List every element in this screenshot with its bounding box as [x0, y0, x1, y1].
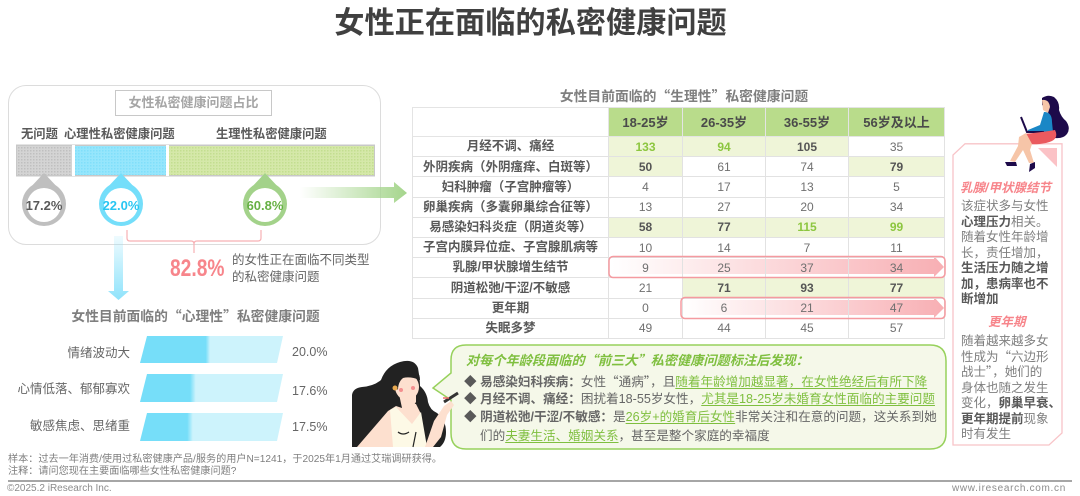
table: physical problems by age: 45 [800, 321, 814, 335]
table: physical problems by age [412, 107, 945, 339]
highlight arrows on table [646, 258, 944, 318]
illustration: woman with laptop [1005, 96, 1069, 172]
table: physical problems by age: 子宫内膜异位症、子宫腺肌病等 [423, 240, 598, 254]
table: physical problems by age: 11 [890, 241, 903, 255]
note: menopause [961, 315, 1061, 442]
callout: 82.8% [170, 253, 370, 284]
table: physical problems by age: 34 [890, 261, 903, 275]
table: physical problems by age: 133 [635, 140, 656, 154]
finding 3: 们的夫妻生活、婚姻关系，甚至是整个家庭的幸福度 [480, 429, 770, 443]
table: physical problems by age: 94 [717, 140, 731, 154]
drop: physical 60.8%: 60.8% [247, 198, 284, 213]
bar: anxiety: 17.5% [292, 420, 327, 434]
bar: mood swings: 20.0% [292, 345, 327, 359]
note: menopause: 更年期提前现象 [961, 408, 1049, 426]
table: physical problems by age: 99 [890, 220, 903, 234]
panel: notes on breast and menopause [952, 143, 1063, 446]
table: physical problems by age: 21 [800, 301, 814, 315]
table: physical problems by age: 13 [639, 200, 652, 214]
bar: anxiety: 敏感焦虑、思绪重 [30, 418, 130, 433]
note: breast / thyroid nodules: 该症状多与女性 [961, 199, 1049, 213]
table: physical problems by age: 易感染妇科炎症（阴道炎等） [429, 220, 592, 234]
callout: 82.8%: 的女性正在面临不同类型 [232, 253, 370, 267]
table: physical problems by age: 27 [717, 200, 731, 214]
note: menopause: 随着越来越多女 [961, 330, 1049, 349]
drop: none 17.2%: 17.2% [26, 198, 63, 213]
table: physical problems by age: 49 [639, 321, 652, 335]
table: physical problems by age: 18-25岁 [622, 114, 669, 130]
table: physical problems by age: 17 [717, 180, 731, 194]
table: physical problems by age: 13 [800, 180, 814, 194]
table: physical problems by age: 61 [717, 160, 731, 174]
note: breast / thyroid nodules: 长，责任增加， [961, 246, 1049, 260]
note: menopause: 战士”，她们的 [961, 361, 1042, 380]
drop: mental 22.0% [99, 173, 143, 226]
table: physical problems by age: 10 [639, 241, 652, 255]
table: physical problems by age: 失眠多梦 [485, 321, 536, 335]
table: physical problems by age: 卵巢疾病（多囊卵巢综合征等） [423, 200, 598, 214]
table: physical problems by age: 93 [800, 281, 814, 295]
note: breast / thyroid nodules: 生活压力随之增 [961, 261, 1049, 275]
footer rule [8, 480, 1072, 482]
arrow: to physical table [300, 182, 407, 203]
table: physical problems by age: 20 [800, 200, 814, 214]
table: physical problems by age: 74 [800, 160, 814, 174]
arrow: to mental chart [108, 236, 129, 300]
drop: mental 22.0%: 22.0% [103, 198, 140, 213]
heading: mental problems: 女性目前面临的“心理性”私密健康问题 [71, 305, 320, 325]
highlight outlines on table [608, 256, 946, 320]
note: breast / thyroid nodules: 心理压力相关。 [961, 214, 1049, 228]
panel heading: 女性私密健康问题占比 [128, 95, 258, 110]
table: physical problems by age: 7 [804, 241, 810, 255]
table: physical problems by age: 35 [890, 140, 903, 154]
segment labels: 无问题 [21, 127, 58, 141]
table: physical problems by age: 56岁及以上 [863, 114, 930, 130]
bracket 82.8% [127, 230, 261, 253]
note: breast / thyroid nodules: 断增加 [961, 292, 999, 306]
footer right: www.iresearch.com.cn [952, 483, 1066, 494]
finding 3: ◆ 阴道松弛/干涩/不敏感：是26岁+的婚育后女性非常关注和在意的问题，这关系到她 [464, 410, 937, 424]
table: physical problems by age: 5 [893, 180, 900, 194]
table: physical problems by age: 26-35岁 [701, 114, 747, 130]
panel: share of private health problems [8, 85, 381, 245]
table: physical problems by age: 77 [717, 220, 731, 234]
note: breast / thyroid nodules: 随着女性年龄增 [961, 230, 1049, 244]
table: physical problems by age: 25 [717, 261, 731, 275]
title: 女性正在面临的私密健康问题 [334, 7, 727, 40]
table: physical problems by age: 14 [717, 241, 731, 255]
bar: low mood [17, 374, 327, 402]
table: physical problems by age: 外阴疾病（外阴瘙痒、白斑等） [423, 160, 598, 174]
table: physical problems by age: 71 [717, 281, 731, 295]
table: physical problems by age: 79 [890, 160, 903, 174]
table: physical problems by age: 乳腺/甲状腺增生结节 [452, 260, 568, 274]
note: menopause: 性成为“六边形 [961, 346, 1049, 364]
note: breast / thyroid nodules: 加，患病率也不 [961, 276, 1049, 290]
table: physical problems by age: 57 [890, 321, 903, 335]
table: physical problems by age: 21 [639, 281, 652, 295]
callout: 82.8%: 的私密健康问题 [232, 270, 320, 284]
finding 3 [464, 410, 937, 443]
finding 1: ◆ 易感染妇科疾病：女性“通病”，且随着年龄增加越显著，在女性绝经后有所下降 [464, 371, 927, 390]
table: physical problems by age: 6 [721, 301, 727, 315]
footnotes [8, 453, 442, 477]
segment labels: 生理性私密健康问题 [216, 127, 327, 141]
stacked bar with percentage drops [16, 144, 407, 300]
table: physical problems by age: 9 [642, 261, 649, 275]
bar: mood swings: 情绪波动大 [67, 346, 130, 360]
note: menopause: 时有发生 [961, 423, 1011, 442]
panel heading [115, 90, 272, 116]
drop: none 17.2% [22, 173, 66, 226]
table: physical problems by age: 115 [797, 220, 817, 234]
drop: physical 60.8% [243, 173, 287, 226]
segment labels: 心理性私密健康问题 [64, 127, 175, 141]
footer left: ©2025.2 iResearch Inc. [7, 483, 112, 494]
note: menopause: 身体也随之发生 [961, 376, 1049, 396]
note: menopause: 变化，卵巢早衰、 [961, 392, 1061, 411]
table: physical problems by age: 105 [797, 140, 817, 154]
bar: anxiety [30, 413, 327, 441]
bar: low mood: 17.6% [292, 384, 327, 398]
callout heading: 对每个年龄段面临的“前三大”私密健康问题标注后发现： [466, 350, 809, 369]
table: physical problems by age: 更年期 [492, 301, 529, 315]
bar chart: mental problems [17, 336, 328, 441]
arrow: menopause [684, 297, 944, 318]
heading: physical problems: 女性目前面临的“生理性”私密健康问题 [560, 85, 808, 105]
note: breast / thyroid nodules: 乳腺/甲状腺结节 [960, 181, 1051, 195]
bar: low mood: 心情低落、郁郁寡欢 [17, 381, 130, 396]
arrow: breast / thyroid [612, 256, 944, 277]
note: menopause: 更年期 [988, 315, 1026, 329]
finding 2: ◆ 月经不调、痛经：困扰着18-55岁女性，尤其是18-25岁未婚育女性面临的主要问题 [464, 392, 935, 406]
table: physical problems by age: 0 [642, 301, 649, 315]
note: breast / thyroid nodules [960, 181, 1053, 306]
bar: mood swings [67, 336, 327, 363]
table: physical problems by age: 44 [717, 321, 731, 335]
table: physical problems by age: 77 [890, 281, 903, 295]
table: physical problems by age: 58 [639, 220, 652, 234]
table: physical problems by age: 50 [639, 160, 652, 174]
illustration: woman with phone [352, 360, 459, 448]
table: physical problems by age: 阴道松弛/干涩/不敏感 [451, 281, 570, 295]
callout: top three findings [432, 344, 947, 450]
table: physical problems by age: 37 [800, 261, 814, 275]
table: physical problems by age: 36-55岁 [784, 114, 830, 130]
footnotes: 注释：请问您现在主要面临哪些女性私密健康问题? [8, 466, 236, 477]
table: physical problems by age: 34 [890, 200, 903, 214]
table: physical problems by age: 4 [642, 180, 649, 194]
table: physical problems by age: 妇科肿瘤（子宫肿瘤等） [442, 180, 579, 194]
table: physical problems by age: 月经不调、痛经 [467, 139, 554, 153]
segment labels [21, 127, 327, 141]
footnotes: 样本：过去一年消费/使用过私密健康产品/服务的用户N=1241，于2025年1月通过艾瑞调研获得。 [8, 454, 442, 465]
callout: 82.8%: 82.8% [170, 255, 224, 282]
table: physical problems by age: 47 [890, 301, 903, 315]
